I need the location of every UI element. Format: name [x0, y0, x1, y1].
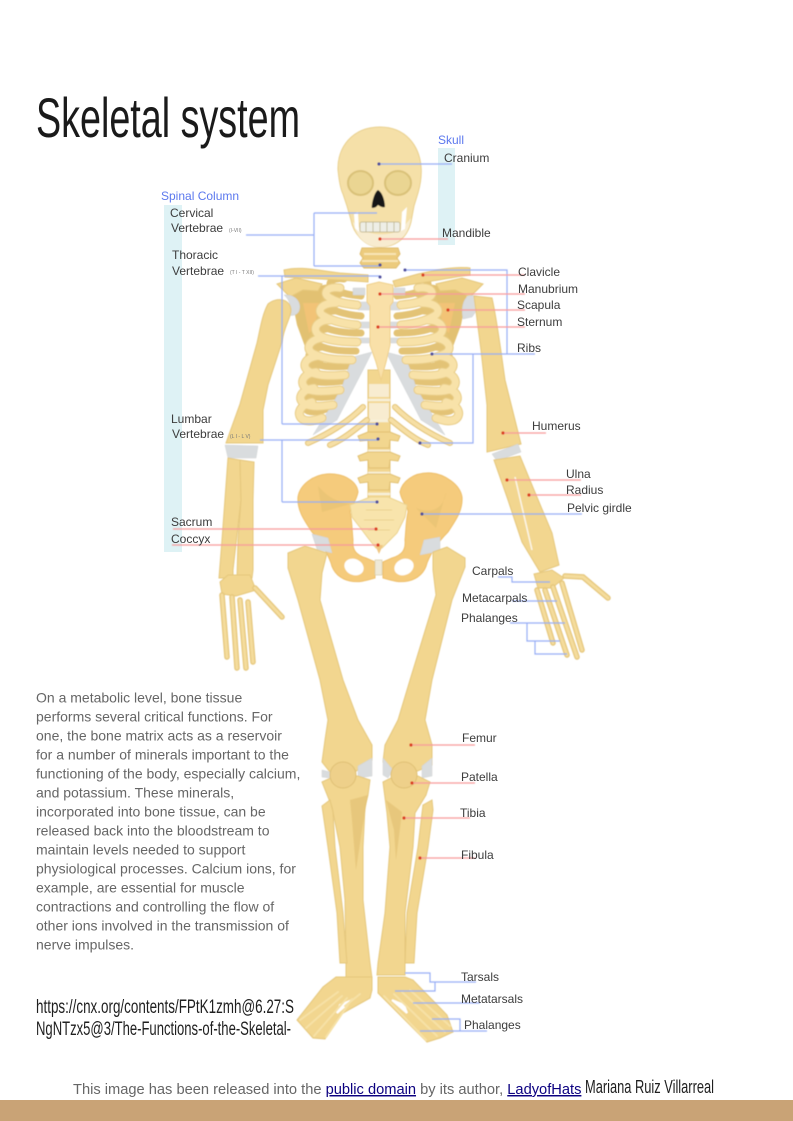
- text block: metabolic functions: On a metabolic level, bone tissue: [36, 690, 242, 706]
- anatomical labels: Coccyx: [171, 532, 210, 546]
- anatomical labels: Sacrum: [171, 515, 212, 529]
- text block: metabolic functions: one, the bone matrix acts as a reservoir: [36, 728, 282, 744]
- text block: metabolic functions: performs several critical functions. For: [36, 708, 273, 724]
- anatomical labels: Cervical: [170, 206, 213, 220]
- anatomical labels: Manubrium: [518, 282, 578, 296]
- skeleton illustration: [219, 127, 608, 1042]
- right arm: [462, 295, 559, 572]
- anatomical labels: Metatarsals: [461, 992, 523, 1006]
- anatomical labels: Carpals: [472, 564, 513, 578]
- anatomical labels: Tibia: [460, 806, 486, 820]
- attribution: [73, 1077, 714, 1098]
- source url: NgNTzx5@3/The-Functions-of-the-Skeletal-: [36, 1019, 291, 1040]
- sacrum and coccyx: [350, 497, 407, 554]
- anatomical labels: Metacarpals: [462, 591, 527, 605]
- anatomical labels: Pelvic girdle: [567, 501, 632, 515]
- left arm: [219, 295, 300, 578]
- rib cage: [299, 279, 459, 445]
- left hand: [220, 575, 282, 668]
- right hand: [534, 570, 608, 657]
- anatomical labels: Vertebrae: [172, 264, 224, 278]
- right leg: [377, 547, 465, 975]
- anatomical labels: Cranium: [444, 151, 489, 165]
- anatomical labels: Mandible: [442, 226, 491, 240]
- skull: [338, 127, 421, 247]
- panel: skull and spinal column highlight bars: [164, 148, 455, 552]
- anatomical labels: Vertebrae: [172, 427, 224, 441]
- text block: metabolic functions: incorporated into bone tissue, can be: [36, 804, 266, 820]
- attribution: This image has been released into the public domain by its author, LadyofHats: [73, 1082, 581, 1098]
- anatomical labels: Sternum: [517, 315, 562, 329]
- text block: metabolic functions: maintain levels needed to support: [36, 842, 245, 858]
- red leaders: [172, 239, 581, 858]
- text block: metabolic functions: nerve impulses.: [36, 936, 134, 952]
- anatomical labels: Radius: [566, 483, 603, 497]
- red dots: [374, 238, 530, 860]
- left leg: [288, 546, 372, 978]
- scapula shadows: [290, 284, 468, 352]
- right foot: [378, 977, 453, 1042]
- anatomical labels: Ulna: [566, 467, 591, 481]
- text block: metabolic functions: other ions involved in the transmission of: [36, 918, 289, 934]
- text block: metabolic functions: physiological processes. Calcium ions, for: [36, 860, 296, 876]
- attribution: Mariana Ruiz Villarreal: [585, 1077, 714, 1097]
- anatomical labels: Skull: [438, 133, 464, 147]
- anatomical labels: Tarsals: [461, 970, 499, 984]
- spine: [358, 370, 400, 498]
- anatomical labels: Scapula: [517, 298, 561, 312]
- anatomical labels: Fibula: [461, 848, 494, 862]
- anatomical labels: [161, 133, 632, 1032]
- title: Skeletal system: [36, 86, 300, 149]
- footer bar: [0, 1100, 793, 1121]
- left foot: [297, 977, 372, 1039]
- blue dots: [376, 162, 434, 516]
- text block: metabolic functions: released back into the bloodstream to: [36, 822, 270, 838]
- anatomical labels: Ribs: [517, 341, 541, 355]
- anatomical labels: Femur: [462, 731, 497, 745]
- anatomical labels: Humerus: [532, 419, 581, 433]
- source url: https://cnx.org/contents/FPtK1zmh@6.27:S: [36, 997, 294, 1018]
- anatomical labels: Thoracic: [172, 248, 218, 262]
- hip cartilage: [312, 534, 440, 555]
- text block: metabolic functions: contractions and controlling the flow of: [36, 898, 274, 914]
- neck vertebrae: [360, 248, 400, 268]
- anatomical labels: (I-VII): [229, 228, 242, 234]
- sternum: [367, 282, 393, 380]
- clavicles and shoulders: [277, 267, 483, 297]
- anatomical labels: Patella: [461, 770, 498, 784]
- anatomical labels: (L I - L V): [230, 434, 251, 440]
- text block: metabolic functions: [36, 690, 300, 952]
- text block: metabolic functions: example, are essential for muscle: [36, 880, 245, 896]
- text block: metabolic functions: for a number of minerals important to the: [36, 746, 289, 762]
- text block: metabolic functions: functioning of the body, especially calcium,: [36, 766, 300, 782]
- text block: metabolic functions: and potassium. These minerals,: [36, 784, 234, 800]
- pelvis: [298, 473, 462, 582]
- anatomical labels: Vertebrae: [171, 221, 223, 235]
- anatomical labels: Clavicle: [518, 265, 560, 279]
- anatomical labels: Phalanges: [461, 611, 518, 625]
- blue leaders: [246, 164, 582, 1031]
- anatomical labels: Spinal Column: [161, 189, 239, 203]
- anatomical labels: Lumbar: [171, 412, 212, 426]
- leader lines: [172, 162, 582, 1031]
- anatomical labels: Phalanges: [464, 1018, 521, 1032]
- anatomical labels: (T I - T XII): [230, 270, 254, 276]
- source url: [36, 997, 294, 1040]
